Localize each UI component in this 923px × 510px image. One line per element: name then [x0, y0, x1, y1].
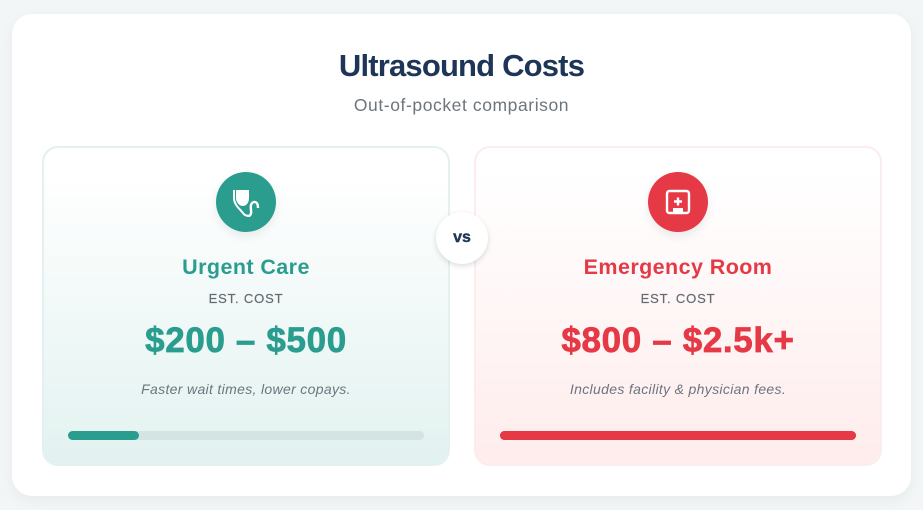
- vs badge: vs: [453, 229, 471, 246]
- cost label: EST. COST: [209, 291, 283, 306]
- progress bar: [68, 431, 424, 440]
- price range: $800 – $2.5k+: [561, 321, 795, 360]
- title: Ultrasound Costs: [339, 48, 584, 83]
- card heading: Urgent Care: [182, 255, 310, 279]
- subtitle: Out-of-pocket comparison: [354, 95, 569, 115]
- icon: hospital: [648, 172, 708, 232]
- panel: emergency room: [474, 146, 882, 466]
- card heading: Emergency Room: [584, 255, 772, 279]
- progress bar: [500, 431, 856, 440]
- price range: $200 – $500: [145, 321, 347, 360]
- note: Faster wait times, lower copays.: [141, 381, 351, 397]
- vs badge: [436, 212, 488, 264]
- note: Includes facility & physician fees.: [570, 381, 786, 397]
- cost label: EST. COST: [641, 291, 715, 306]
- icon: stethoscope: [216, 172, 276, 232]
- panel: urgent care: [42, 146, 450, 466]
